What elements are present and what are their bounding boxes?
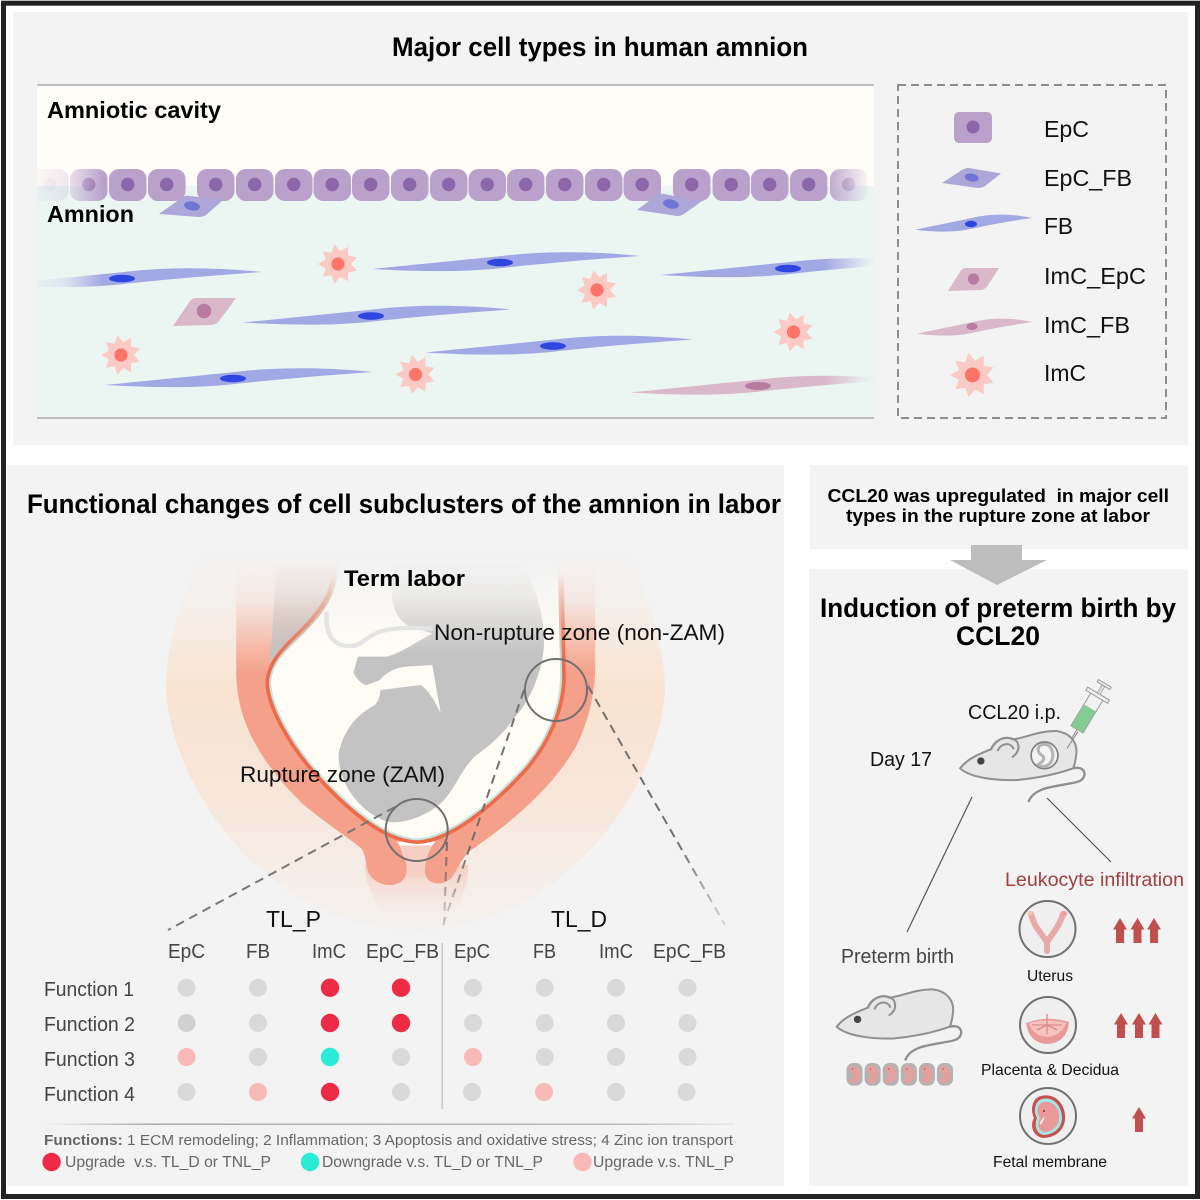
- row labels: Function 2: [44, 1014, 135, 1036]
- legend label: ImC_FB: ImC_FB: [1044, 312, 1130, 338]
- dot legend: Upgrade v.s. TL_D or TNL_P: [65, 1154, 271, 1171]
- column labels: ImC: [312, 941, 346, 963]
- row labels: Function 4: [44, 1084, 135, 1106]
- group header: TL_P: TL_P: [266, 906, 321, 932]
- legend icon: ImC: [950, 353, 994, 397]
- legend icon: FB: [915, 215, 1032, 232]
- label: non-rupture zone: Non-rupture zone (non-ZAM): [434, 620, 725, 645]
- heading: induction of preterm birth: Induction of preterm birth by: [820, 593, 1176, 623]
- label: amnion: Amnion: [47, 201, 134, 227]
- zoom line: ZAM to divider: [444, 842, 447, 925]
- functions key text: Functions: 1 ECM remodeling; 2 Inflammation; 3 Apoptosis and oxidative stress; 4 Zinc ion transport: [44, 1133, 733, 1149]
- preterm mouse: [837, 989, 961, 1060]
- zoom line: non-ZAM to TL_D: [588, 686, 725, 925]
- column labels: FB: [246, 941, 270, 963]
- tissue illustration: [0, 84, 928, 419]
- connector to leukocyte infiltration: [1047, 798, 1111, 862]
- legend label: EpC_FB: EpC_FB: [1044, 165, 1132, 191]
- dot legend: Downgrade v.s. TL_D or TNL_P: [322, 1154, 543, 1171]
- column labels: EpC: [454, 941, 490, 963]
- arrows: placenta increase: [1114, 1013, 1162, 1038]
- legend label: ImC_EpC: ImC_EpC: [1044, 263, 1146, 289]
- label: placenta and decidua: Placenta & Decidua: [981, 1062, 1119, 1079]
- fetus silhouette: [339, 560, 544, 822]
- EpC_FB cells in tissue: [159, 194, 702, 217]
- arrow: down from finding to induction: [950, 545, 1047, 585]
- icon: uterus: [1020, 901, 1076, 957]
- label: term labor: Term labor: [344, 566, 465, 591]
- column labels: ImC: [599, 941, 633, 963]
- legend label: FB: FB: [1044, 213, 1073, 239]
- connector to preterm birth: [907, 797, 972, 932]
- arrow: fetal membrane increase: [1132, 1107, 1146, 1132]
- zoom line: non-ZAM to divider: [443, 690, 524, 925]
- title: major cell types: Major cell types in human amnion: [392, 32, 808, 62]
- label: CCL20 i.p.: CCL20 i.p.: [968, 701, 1061, 724]
- icon: placenta and decidua: [1020, 997, 1076, 1053]
- function dot matrix: [44, 906, 726, 1109]
- umbilical cord: [326, 612, 432, 646]
- legend icon: ImC_EpC: [948, 268, 999, 291]
- panel: major cell types: [0, 12, 1188, 445]
- label: fetal membrane: Fetal membrane: [993, 1154, 1107, 1171]
- heading: functional changes: Functional changes of cell subclusters of the amnion in labor: [27, 489, 781, 519]
- uterus illustration: [166, 545, 725, 930]
- treated mouse with syringe: [960, 677, 1116, 802]
- legend: cell types: [898, 85, 1166, 418]
- icon: embryo in belly: [1031, 742, 1058, 769]
- legend label: EpC: EpC: [1044, 116, 1089, 142]
- group header: TL_D: TL_D: [551, 906, 607, 932]
- icon: syringe: [1055, 677, 1116, 754]
- column labels: EpC_FB: [366, 941, 439, 963]
- legend label: ImC: ImC: [1044, 360, 1086, 386]
- matrix dots: [178, 978, 697, 1101]
- legend icon: ImC_FB: [917, 319, 1032, 336]
- panel: functional changes: [7, 465, 784, 1186]
- row labels: Function 3: [44, 1049, 135, 1071]
- dot legend: [42, 1153, 734, 1171]
- label: amniotic cavity: Amniotic cavity: [47, 97, 221, 123]
- label: day 17: Day 17: [870, 748, 932, 771]
- column labels: EpC: [168, 941, 205, 963]
- label: preterm birth: Preterm birth: [841, 946, 954, 968]
- panel: CCL20 upregulated: [810, 465, 1188, 549]
- preterm pups: [846, 1063, 953, 1086]
- panel: induction of preterm birth: [809, 569, 1188, 1186]
- row labels: Function 1: [44, 979, 134, 1001]
- epithelial cell row: [31, 169, 868, 201]
- legend icon: EpC: [954, 112, 992, 143]
- text: CCL20 finding: [828, 485, 1169, 526]
- column labels: [168, 941, 726, 963]
- fibroblast cells: [44, 252, 866, 395]
- dot legend: Upgrade v.s. TNL_P: [593, 1154, 734, 1171]
- ImC cells in tissue: [101, 244, 812, 394]
- label: rupture zone: Rupture zone (ZAM): [240, 762, 445, 787]
- column labels: FB: [533, 941, 556, 963]
- circle: rupture zone: [386, 799, 448, 861]
- heading: induction of preterm birth: CCL20: [956, 621, 1040, 651]
- icon: fetal membrane: [1020, 1088, 1076, 1144]
- row labels: [44, 979, 135, 1106]
- arrows: uterus increase: [1113, 918, 1161, 943]
- legend icon: EpC_FB: [942, 168, 1001, 188]
- zoom line: ZAM to TL_P: [168, 807, 395, 930]
- ImC_FB cell in tissue: [630, 376, 898, 395]
- text: CCL20 finding: CCL20 was upregulated in major cell: [828, 485, 1169, 506]
- text: CCL20 finding: types in the rupture zone at labor: [846, 505, 1150, 526]
- label: uterus: Uterus: [1027, 968, 1073, 985]
- circle: non-rupture zone: [525, 659, 587, 721]
- heading: induction of preterm birth: [820, 593, 1176, 651]
- column labels: EpC_FB: [653, 941, 726, 963]
- ImC_EpC cell in tissue: [173, 298, 236, 326]
- label: leukocyte infiltration: Leukocyte infiltration: [1005, 869, 1184, 891]
